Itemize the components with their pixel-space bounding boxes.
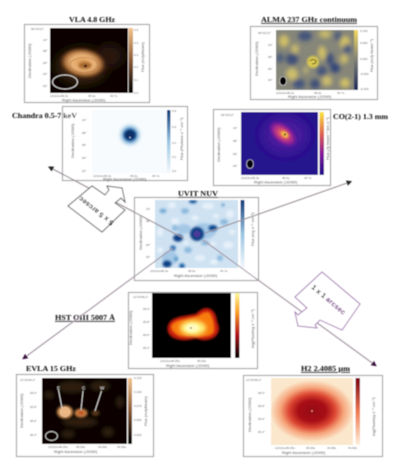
panel: ALMA 237 GHz continuum: -0.100	[360, 87, 369, 91]
panel: CO(2-1) 1.3 mm: Right Ascension (J2000)	[254, 180, 298, 184]
heading: CO(2-1) 1.3 mm: CO(2-1) 1.3 mm	[333, 112, 389, 121]
panel: ALMA 237 GHz continuum: 12h13m45.2s	[276, 91, 295, 95]
panel: ALMA 237 GHz continuum: 06″	[268, 67, 272, 71]
panel: EVLA 15 GHz: 45.00s	[76, 445, 86, 449]
X-ray map	[116, 120, 144, 150]
panel: UVIT NUV: 12h13m45.2s	[150, 269, 169, 273]
panel: VLA 4.8 GHz: 0.2	[134, 65, 139, 69]
panel: Chandra 0.5-7 keV: 04″	[82, 156, 86, 160]
panel: UVIT NUV: 45.0s	[188, 269, 196, 273]
heading: VLA 4.8 GHz: VLA 4.8 GHz	[69, 15, 116, 24]
panel: UVIT NUV: 04″	[146, 243, 150, 247]
panel: HST OIII 5007 A: Declination (J2000)	[128, 310, 133, 345]
radio map with components E, C, W	[42, 378, 127, 444]
panel: Chandra 0.5-7 keV: Flux (Photons s⁻¹ cm⁻²)	[179, 117, 184, 160]
panel: Chandra 0.5-7 keV: 0.4	[172, 141, 177, 145]
panel: H2 2.4085 µm: 05.6″	[258, 417, 265, 421]
panel: VLA 4.8 GHz: 44.7s	[110, 94, 118, 98]
panel: ALMA 237 GHz continuum: Right Ascension (J2000)	[288, 94, 332, 99]
heading: UVIT NUV: UVIT NUV	[178, 189, 219, 198]
heading: HST OIII 5007 Å: HST OIII 5007 Å	[55, 313, 116, 322]
arrow: to H2 panel	[203, 240, 375, 365]
panel: Chandra 0.5-7 keV: 12h13m45.2s	[93, 174, 112, 178]
panel: Chandra 0.5-7 keV: 45.0s	[130, 174, 138, 178]
panel: Chandra 0.5-7 keV: 06″	[82, 143, 86, 147]
panel: H2 2.4085 µm: Right Ascension (J2000)	[282, 450, 326, 455]
panel: VLA 4.8 GHz: 02″	[43, 84, 47, 88]
radio map	[50, 28, 128, 93]
panel: ALMA 237 GHz continuum: 0.100	[360, 29, 368, 33]
panel: H2 2.4085 µm: 05.4″	[258, 430, 265, 434]
heading: ALMA 237 GHz continuum: ALMA 237 GHz continuum	[261, 15, 358, 24]
panel: Chandra 0.5-7 keV: 10″	[82, 118, 86, 122]
panel: HST OIII 5007 A: 05.8″	[143, 320, 150, 324]
panel: EVLA 15 GHz: 0.050	[134, 418, 142, 422]
panel: EVLA 15 GHz: 0.025	[134, 433, 142, 437]
panel: VLA 4.8 GHz: Flux (mJy/beam)	[140, 42, 145, 72]
panel: EVLA 15 GHz: 05.6″	[30, 419, 37, 423]
panel: EVLA 15 GHz: 44.95s	[98, 445, 108, 449]
panel: ALMA 237 GHz continuum: 04″	[268, 78, 272, 82]
panel: VLA 4.8 GHz: 12h13m45.2s	[50, 94, 69, 98]
panel: EVLA 15 GHz: Right Ascension (J2000)	[54, 449, 98, 454]
radio map with components E, C, W: C	[82, 386, 86, 390]
panel: H2 2.4085 µm: 05.8″	[258, 404, 265, 408]
panel: EVLA 15 GHz: 44.90s	[117, 445, 127, 449]
panel: VLA 4.8 GHz: 45.0s	[88, 94, 96, 98]
panel: CO(2-1) 1.3 mm: 06″	[233, 152, 237, 156]
panel: H2 2.4085 µm: 12°32′06.2″	[246, 378, 261, 382]
panel: Chandra 0.5-7 keV: 08″	[82, 131, 86, 135]
panel: HST OIII 5007 A	[55, 292, 258, 368]
panel: ALMA 237 GHz continuum: 08″	[268, 55, 272, 59]
panel: H2 2.4085 µm	[244, 364, 382, 456]
panel: EVLA 15 GHz: 0.100	[134, 390, 142, 394]
panel: ALMA 237 GHz continuum: Declination (J2000)	[254, 41, 259, 76]
panel: ALMA 237 GHz continuum: -0.050	[360, 72, 369, 76]
panel: VLA 4.8 GHz	[24, 15, 150, 102]
panel: CO(2-1) 1.3 mm: 45.0s	[282, 176, 290, 180]
panel: H2 2.4085 µm: 44.95s	[327, 446, 337, 450]
radio map with components E, C, W: E	[57, 386, 60, 390]
component leader lines	[58, 390, 102, 411]
continuum map	[276, 30, 354, 90]
panel: H2 2.4085 µm: log(Flux/erg s⁻¹ cm⁻²)	[371, 396, 376, 436]
panel: UVIT NUV: 10″	[146, 207, 150, 211]
panel: EVLA 15 GHz: 0.125	[134, 376, 142, 380]
panel: CO(2-1) 1.3 mm: 04″	[233, 164, 237, 168]
panel: VLA 4.8 GHz: 0.0	[134, 91, 139, 95]
panel: ALMA 237 GHz continuum: 45.0s	[314, 91, 322, 95]
heading: H2 2.4085 µm: H2 2.4085 µm	[301, 364, 351, 373]
panel: VLA 4.8 GHz: 06°32′12″	[31, 27, 44, 31]
panel: CO(2-1) 1.3 mm: 12h13m45.2s	[241, 176, 260, 180]
panel: HST OIII 5007 A: Right Ascension (J2000)	[166, 363, 210, 368]
panel: H2 2.4085 µm: 45.00s	[306, 446, 316, 450]
heading: Chandra 0.5-7 keV: Chandra 0.5-7 keV	[12, 111, 78, 120]
panel: ALMA 237 GHz continuum: 44.7s	[337, 91, 345, 95]
radio map with components E, C, W: W	[100, 386, 105, 390]
panel: Chandra 0.5-7 keV: Declination (J2000)	[70, 123, 75, 158]
panel: HST OIII 5007 A: 06.0″	[143, 307, 150, 311]
panel: EVLA 15 GHz: 05.4″	[30, 433, 37, 437]
panel: CO(2-1) 1.3 mm: Flux (Jy beam⁻¹ km s⁻¹)	[325, 116, 330, 160]
CO map	[241, 112, 318, 175]
panel: VLA 4.8 GHz: Declination (J2000)	[27, 43, 32, 78]
panel: HST OIII 5007 A: log(Flux/erg s⁻¹ cm⁻²)	[250, 308, 255, 348]
panel: ALMA 237 GHz continuum: 0.050	[360, 41, 368, 45]
panel: Chandra 0.5-7 keV: 0.6	[172, 125, 177, 129]
panel: VLA 4.8 GHz: 08″	[43, 49, 47, 53]
panel: UVIT NUV: Flux (erg s⁻¹ cm⁻²)	[250, 212, 255, 246]
panel: EVLA 15 GHz: 12°32′06.2″	[20, 378, 35, 382]
panel: HST OIII 5007 A: 12°32′06.2″	[133, 295, 148, 299]
panel: EVLA 15 GHz: 12h13m45.05s	[48, 445, 68, 449]
panel: VLA 4.8 GHz: Right Ascension (J2000)	[62, 98, 106, 102]
panel: ALMA 237 GHz continuum: Flux (mJy beam⁻¹)	[369, 38, 374, 72]
panel: UVIT NUV: Declination (J2000)	[138, 215, 143, 250]
OIII emission map	[152, 293, 231, 358]
arrow: to EVLA panel	[24, 248, 173, 358]
panel: EVLA 15 GHz: 0.075	[134, 404, 142, 408]
panel: CO(2-1) 1.3 mm: 06°32′12″	[221, 113, 234, 117]
panel: VLA 4.8 GHz: 06″	[43, 61, 47, 65]
panel: Chandra 0.5-7 keV: 02″	[82, 169, 86, 173]
panel: VLA 4.8 GHz: 0.3	[134, 53, 139, 57]
label: 1 x 1 arcsec: 1 x 1 arcsec	[310, 284, 346, 317]
block arrow: 1 x 1 arcsec	[295, 272, 360, 330]
arrow: to CO panel	[205, 182, 350, 233]
panel: CO(2-1) 1.3 mm: 10″	[233, 126, 237, 130]
panel: UVIT NUV	[134, 189, 258, 280]
H2 emission map	[270, 378, 354, 445]
panel: VLA 4.8 GHz: 10″	[43, 38, 47, 42]
panel: HST OIII 5007 A: 45.00s	[197, 359, 207, 363]
panel: EVLA 15 GHz: Flux (mJy/beam)	[143, 396, 148, 426]
panel: EVLA 15 GHz: Declination (J2000)	[19, 393, 24, 428]
panel: H2 2.4085 µm: 44.90s	[348, 446, 358, 450]
heading: EVLA 15 GHz: EVLA 15 GHz	[26, 364, 77, 373]
panel: ALMA 237 GHz continuum: 0.000	[360, 57, 368, 61]
panel: Chandra 0.5-7 keV: 0.0	[172, 169, 177, 173]
panel: HST OIII 5007 A: 05.6″	[143, 333, 150, 337]
panel: CO(2-1) 1.3 mm: 08″	[233, 139, 237, 143]
panel: CO(2-1) 1.3 mm: 44.7s	[304, 176, 312, 180]
panel: Chandra 0.5-7 keV: Right Ascension (J2000)	[103, 176, 147, 182]
panel: UVIT NUV: 08″	[146, 219, 150, 223]
panel: VLA 4.8 GHz: 0.1	[134, 78, 139, 82]
panel: CO(2-1) 1.3 mm: Declination (J2000)	[216, 127, 221, 162]
panel: H2 2.4085 µm: Declination (J2000)	[247, 397, 252, 432]
panel: CO(2-1) 1.3 mm	[214, 110, 389, 186]
ultraviolet map	[155, 200, 238, 269]
arrow: to Chandra and upper-left panels	[50, 168, 183, 238]
panel: ALMA 237 GHz continuum	[250, 15, 378, 100]
panel: UVIT NUV: Right Ascension (J2000)	[174, 273, 218, 278]
panel: EVLA 15 GHz	[16, 364, 154, 456]
panel: H2 2.4085 µm: 06.0″	[258, 391, 265, 395]
panel: VLA 4.8 GHz: 0.5	[134, 28, 139, 32]
panel: Chandra 0.5-7 keV: 44.7s	[152, 174, 160, 178]
panel: Chandra 0.5-7 keV: 0.8	[172, 109, 177, 113]
panel: ALMA 237 GHz continuum: 10″	[268, 43, 272, 47]
panel: EVLA 15 GHz: 05.8″	[30, 405, 37, 409]
panel: UVIT NUV: 44.7s	[220, 269, 228, 273]
panel: Chandra 0.5-7 keV: 0.2	[172, 155, 177, 159]
panel: Chandra 0.5-7 keV	[12, 106, 188, 182]
panel: UVIT NUV: 02″	[146, 255, 150, 259]
panel: H2 2.4085 µm: 12h13m45.05s	[275, 446, 295, 450]
panel: HST OIII 5007 A: 12h13m45.05s	[160, 359, 180, 363]
panel: ALMA 237 GHz continuum: 06°32′12″	[258, 31, 271, 35]
panel: HST OIII 5007 A: 05.4″	[143, 346, 150, 350]
block arrow: 5 x 5 arcsec	[68, 186, 125, 232]
panel: VLA 4.8 GHz: 04″	[43, 72, 47, 76]
panel: VLA 4.8 GHz: 0.4	[134, 41, 139, 45]
panel: EVLA 15 GHz: 06.0″	[30, 391, 37, 395]
label: 5 x 5 arcsec: 5 x 5 arcsec	[78, 195, 115, 226]
